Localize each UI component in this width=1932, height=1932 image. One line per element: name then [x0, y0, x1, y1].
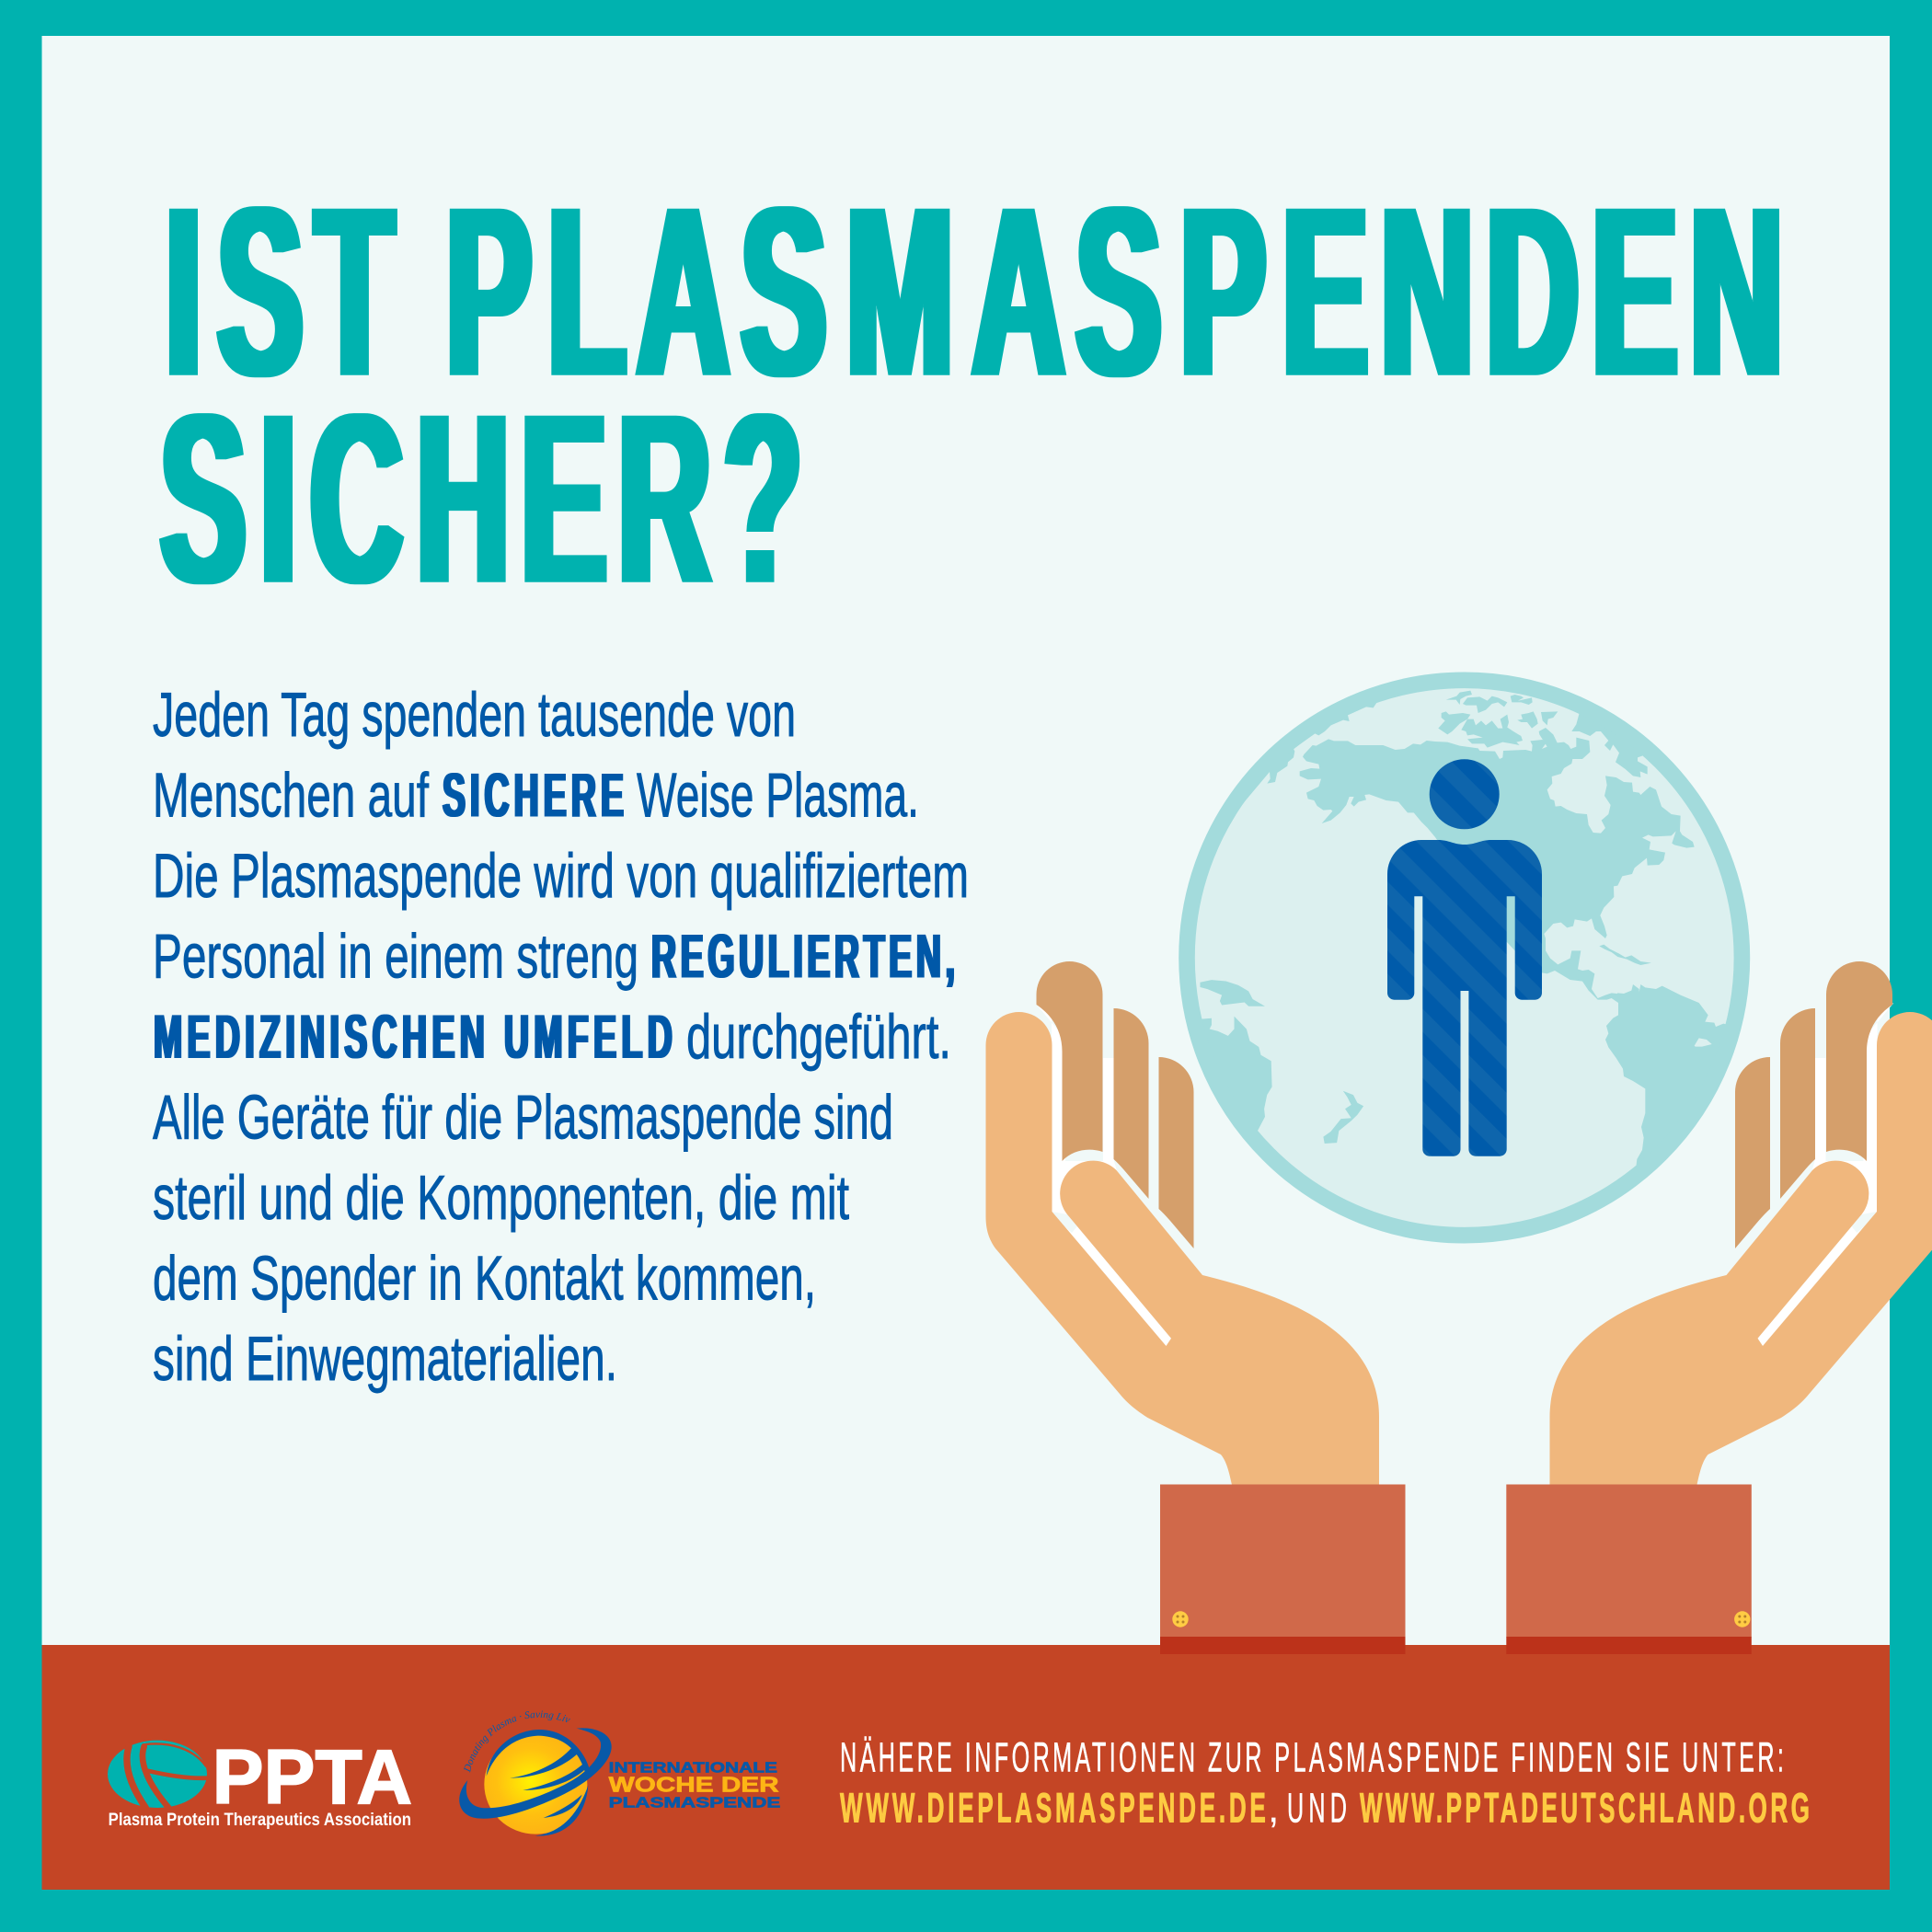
body paragraph: SICHERE — [443, 760, 624, 830]
body paragraph: durchgeführt. — [686, 1002, 951, 1072]
icon: left cuff — [1160, 1485, 1406, 1654]
body paragraph — [153, 680, 969, 1394]
footer text: WWW.PPTADEUTSCHLAND.ORG — [1360, 1785, 1810, 1831]
body paragraph: sind Einwegmaterialien. — [153, 1324, 617, 1394]
logo: Internationale Woche der Plasmaspende — [459, 1710, 781, 1836]
icon: globe — [1167, 665, 1778, 1236]
body paragraph: Jeden Tag spenden tausende von — [153, 680, 796, 750]
body paragraph: dem Spender in Kontakt kommen, — [153, 1244, 816, 1314]
logo: PPTA: Plasma Protein Therapeutics Association — [109, 1811, 411, 1830]
title: SICHER? — [160, 362, 802, 634]
map land masses — [1200, 690, 1726, 1165]
body paragraph: MEDIZINISCHEN UMFELD — [154, 1001, 673, 1072]
body paragraph: steril und die Komponenten, die mit — [153, 1163, 849, 1233]
footer text: , — [1268, 1785, 1280, 1832]
footer text: NÄHERE INFORMATIONEN ZUR PLASMASPENDE FINDEN SIE UNTER: — [840, 1734, 1784, 1781]
icon: right cuff — [1506, 1485, 1752, 1654]
title: IST PLASMASPENDEN — [166, 155, 1783, 427]
body paragraph: REGULIERTEN, — [651, 921, 955, 991]
icon: right hand — [1549, 961, 1932, 1485]
icon: person — [1387, 759, 1542, 1156]
globe ring — [1187, 680, 1742, 1236]
footer text: WWW.DIEPLASMASPENDE.DE — [840, 1785, 1266, 1831]
footer text: UND — [1287, 1785, 1347, 1832]
logo: Internationale Woche der Plasmaspende: WOCHE DER — [609, 1772, 779, 1796]
title — [160, 155, 1783, 634]
footer band — [42, 1645, 1890, 1890]
logo: PPTA — [108, 1734, 412, 1830]
footer text — [840, 1734, 1810, 1832]
logo: PPTA: PPTA — [213, 1734, 412, 1820]
logo: Internationale Woche der Plasmaspende: PLASMASPENDE — [609, 1795, 781, 1811]
logo: Internationale Woche der Plasmaspende: Donating Plasma · Saving Lives — [464, 1710, 570, 1773]
body paragraph: Weise Plasma. — [637, 760, 919, 830]
body paragraph: Menschen auf — [153, 760, 429, 830]
body paragraph: Alle Geräte für die Plasmaspende sind — [153, 1082, 893, 1152]
body paragraph: Personal in einem streng — [153, 922, 638, 992]
logo: Internationale Woche der Plasmaspende: INTERNATIONALE — [609, 1761, 777, 1777]
icon: left hand — [986, 961, 1379, 1485]
body paragraph: Die Plasmaspende wird von qualifiziertem — [153, 841, 969, 911]
